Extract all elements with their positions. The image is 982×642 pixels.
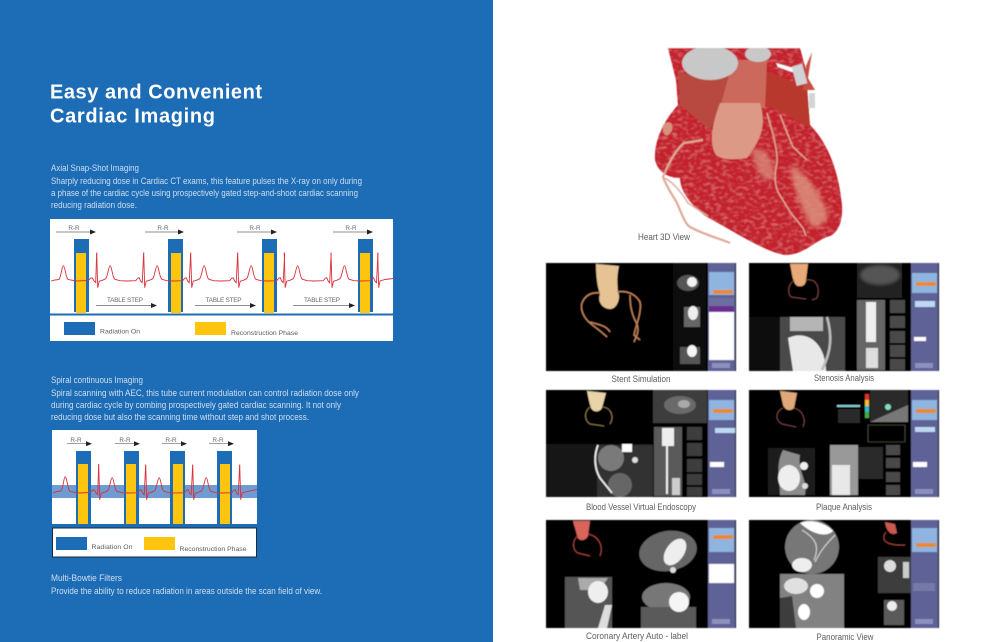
chart: spiral continuous timing diagram bbox=[52, 430, 257, 557]
screen: panoramic view bbox=[749, 520, 939, 628]
ECG trace bbox=[53, 464, 257, 500]
panel: blue left background bbox=[0, 0, 493, 642]
screen: plaque analysis bbox=[749, 390, 939, 497]
title bbox=[50, 82, 262, 128]
radiation and reconstruction bars bbox=[76, 451, 232, 524]
chart: axial step-and-shoot timing diagram bbox=[50, 219, 393, 341]
text block: multi-bowtie filters bbox=[51, 573, 322, 596]
diagram labels: R-R bbox=[119, 437, 131, 444]
diagram labels: R-R bbox=[345, 225, 357, 232]
text block: spiral continuous imaging: Spiral scanning with AEC, this tube current modulation can control radiation dose only bbox=[51, 388, 360, 398]
caption: blood vessel virtual endoscopy: Blood Vessel Virtual Endoscopy bbox=[586, 502, 696, 512]
screen: stenosis analysis bbox=[749, 263, 939, 371]
caption: stent simulation: Stent Simulation bbox=[612, 374, 670, 384]
diagram labels: R-R bbox=[165, 437, 177, 444]
text block: spiral continuous imaging: during cardiac cycle by combing prospectively gated cardiac scanning. It not only bbox=[51, 400, 342, 410]
text block: spiral continuous imaging bbox=[51, 375, 360, 422]
legend: Radiation On bbox=[100, 328, 140, 336]
diagram labels: TABLE STEP bbox=[304, 297, 340, 304]
diagram labels: TABLE STEP bbox=[107, 297, 143, 304]
diagram labels: R-R bbox=[212, 437, 224, 444]
diagram labels: R-R bbox=[249, 225, 261, 232]
screen: coronary artery auto-label bbox=[546, 520, 736, 628]
diagram labels bbox=[68, 225, 357, 304]
title: Easy and Convenient bbox=[50, 82, 262, 104]
legend: Reconstruction Phase bbox=[231, 330, 298, 337]
text block: axial snap-shot imaging: a phase of the cardiac cycle using prospectively gated step-and-shoot cardiac scanning bbox=[51, 188, 358, 198]
text block: multi-bowtie filters: Provide the ability to reduce radiation in areas outside the scan field of view. bbox=[51, 586, 322, 596]
caption: plaque analysis: Plaque Analysis bbox=[816, 502, 872, 512]
text block: axial snap-shot imaging: reducing radiation dose. bbox=[51, 200, 137, 210]
legend bbox=[64, 322, 298, 337]
diagram labels: TABLE STEP bbox=[206, 297, 242, 304]
R-R arrows bbox=[67, 443, 233, 445]
caption: panoramic view: Panoramic View bbox=[816, 632, 874, 642]
text block: axial snap-shot imaging: Axial Snap-Shot Imaging bbox=[51, 163, 139, 173]
coronary arteries bbox=[663, 113, 807, 243]
text block: axial snap-shot imaging bbox=[51, 163, 362, 210]
image: heart 3D view bbox=[655, 40, 842, 255]
screen: stent simulation bbox=[546, 263, 736, 371]
diagram labels bbox=[70, 437, 224, 444]
caption: coronary artery auto-label: Coronary Artery Auto - label bbox=[586, 631, 688, 641]
caption: stenosis analysis: Stenosis Analysis bbox=[814, 373, 874, 383]
radiation and reconstruction bars bbox=[74, 239, 373, 313]
text block: multi-bowtie filters: Multi-Bowtie Filters bbox=[51, 573, 123, 583]
diagram labels: R-R bbox=[68, 225, 80, 232]
R-R arrows bbox=[56, 232, 372, 306]
caption: heart 3D view: Heart 3D View bbox=[638, 232, 690, 242]
legend: Radiation On bbox=[92, 544, 133, 551]
screen: blood vessel virtual endoscopy bbox=[546, 390, 736, 497]
text block: spiral continuous imaging: Spiral continuous Imaging bbox=[51, 375, 143, 385]
text block: axial snap-shot imaging: Sharply reducing dose in Cardiac CT exams, this feature pulses the X-ray on only during bbox=[51, 176, 362, 186]
diagram labels: R-R bbox=[157, 225, 169, 232]
stent and calcium details bbox=[682, 46, 815, 108]
text block: spiral continuous imaging: reducing dose but also the scanning time without step and shot process. bbox=[51, 412, 309, 422]
legend bbox=[52, 528, 256, 557]
title: Cardiac Imaging bbox=[50, 106, 215, 128]
legend: Reconstruction Phase bbox=[180, 546, 247, 553]
diagram labels: R-R bbox=[70, 437, 82, 444]
ECG trace bbox=[51, 253, 393, 288]
